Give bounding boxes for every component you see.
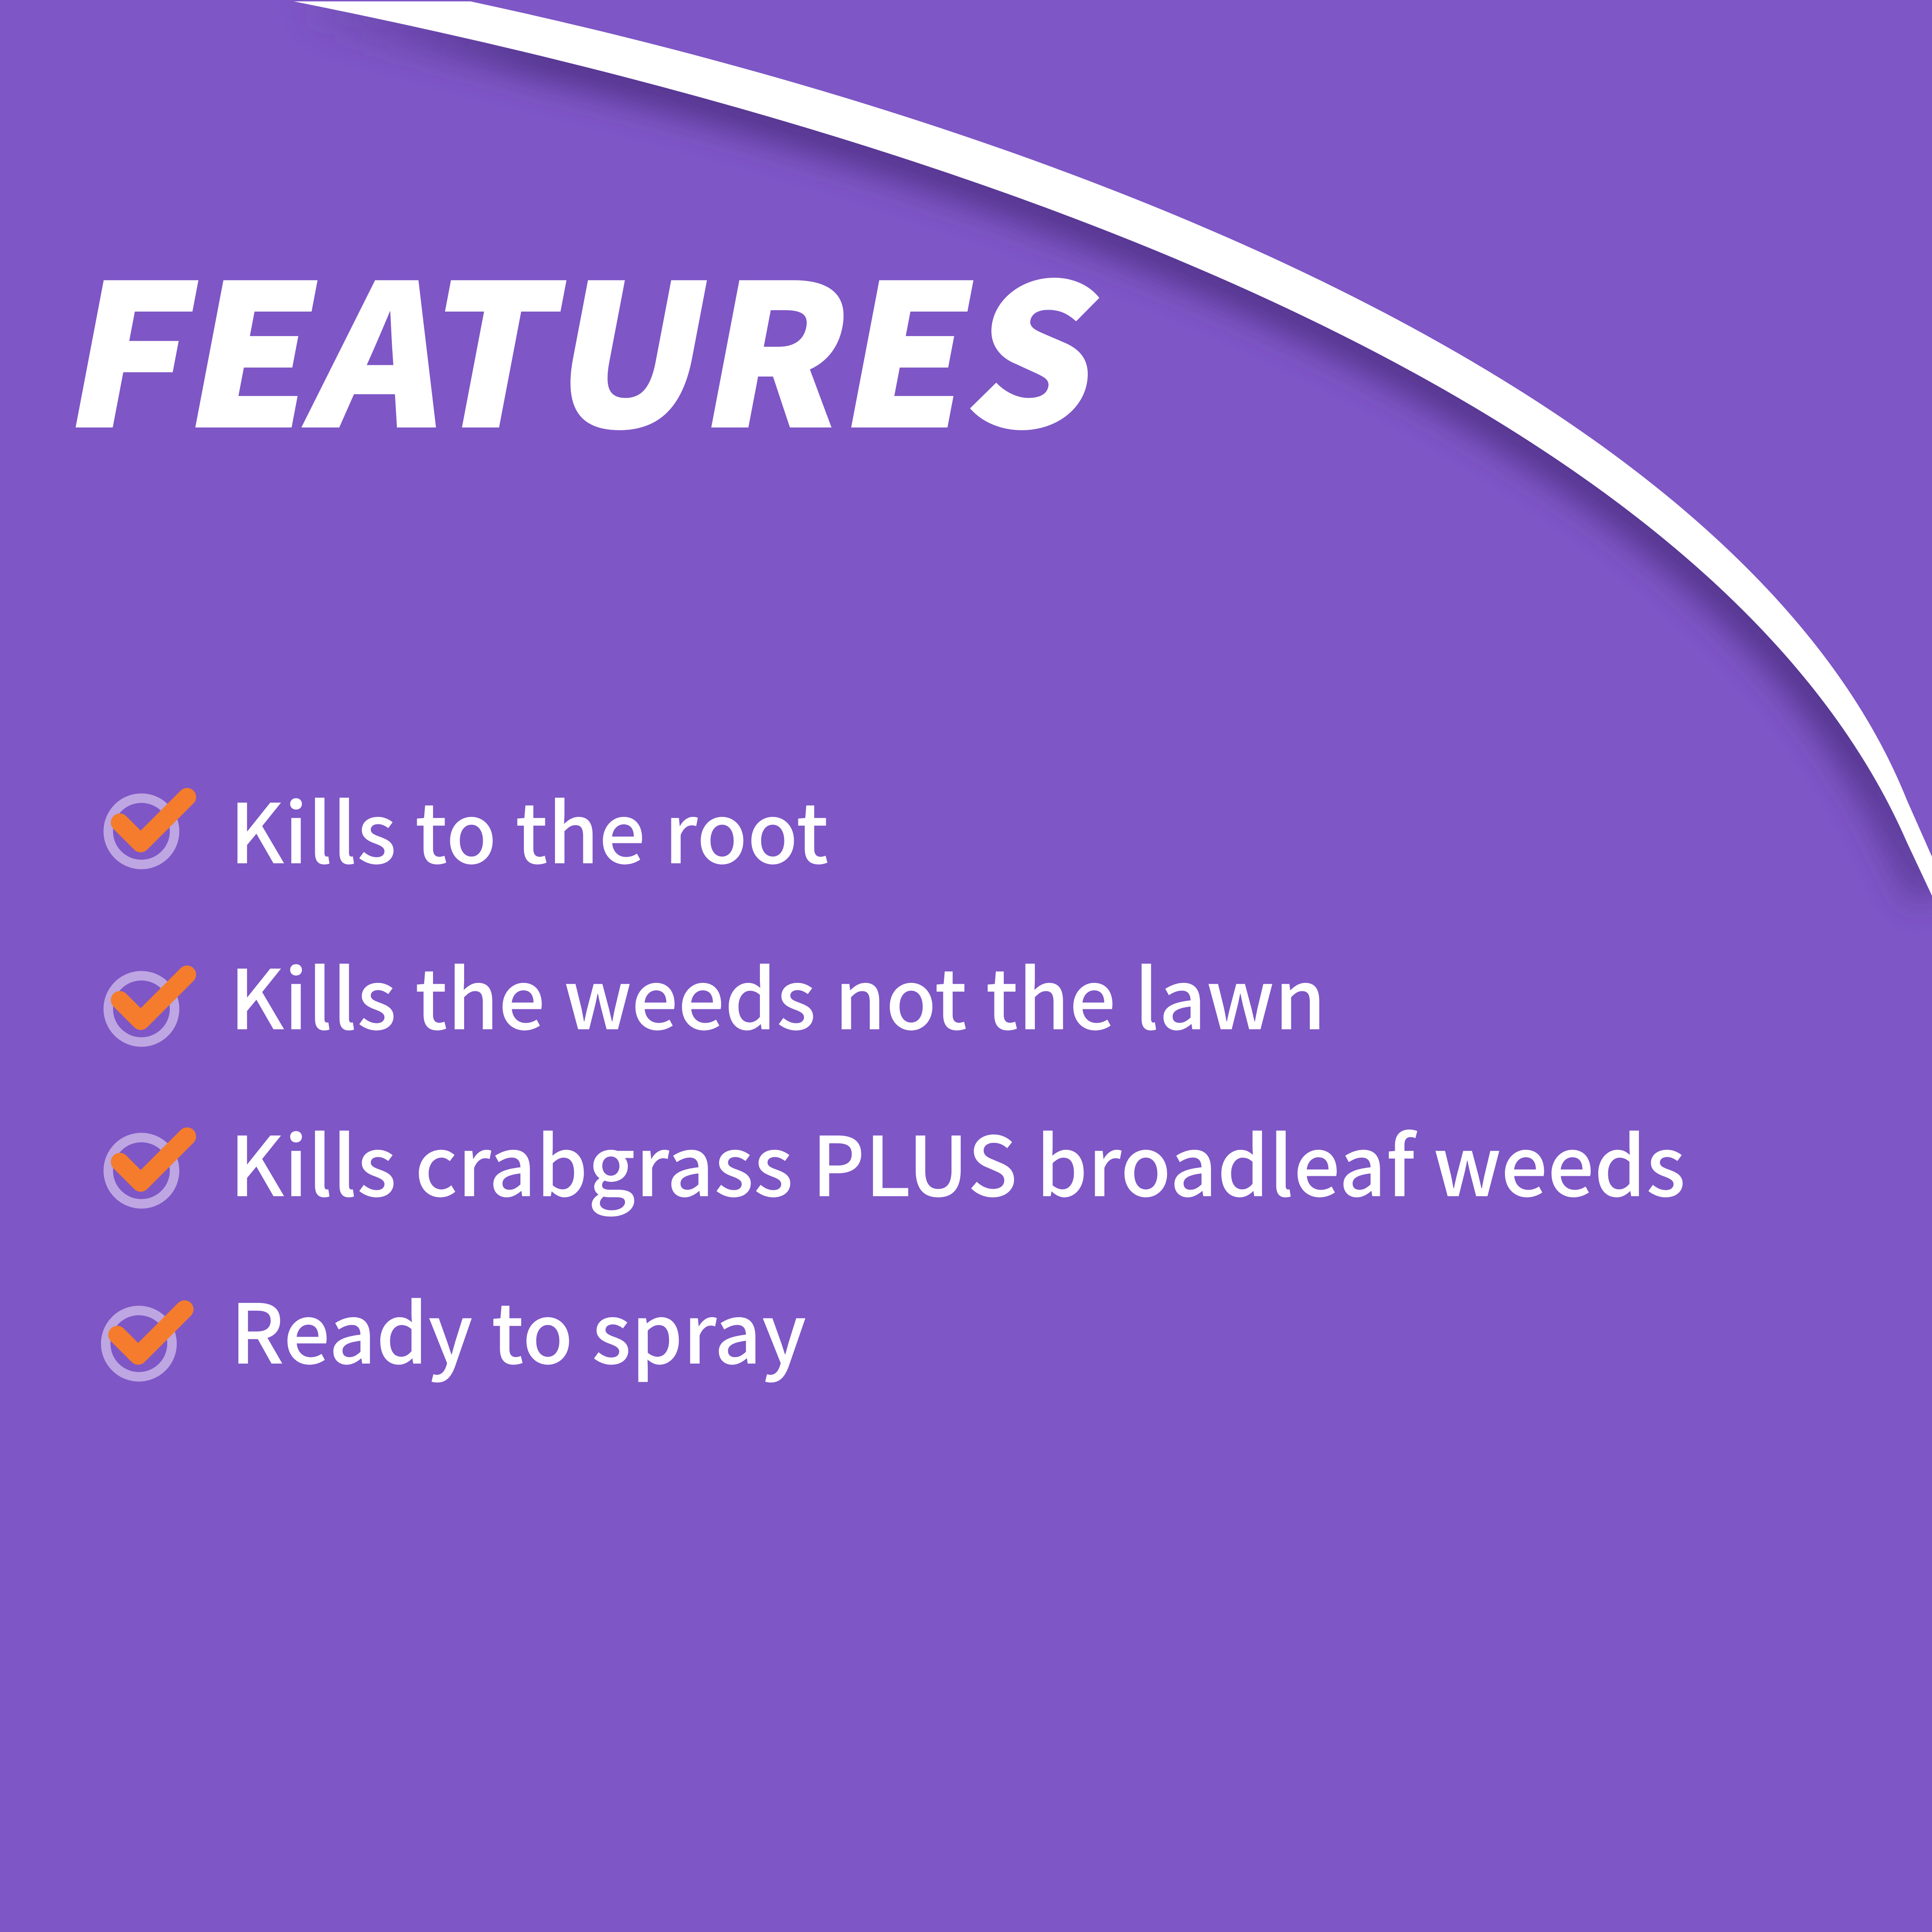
icon: check in circle [108,975,187,1042]
feature row 3 [108,1101,1685,1220]
feature text: Kills crabgrass PLUS broadleaf weeds [230,1101,1685,1220]
feature text: Kills the weeds not the lawn [230,934,1326,1053]
title: FEATURES [50,201,1130,482]
page curl shadow [294,1,1932,896]
icon: check in circle [108,797,187,864]
feature text: Kills to the root [230,768,829,887]
feature row 2 [108,934,1326,1053]
icon: check in circle [106,1309,185,1377]
feature row 1 [108,768,829,887]
feature row 4 [106,1269,806,1388]
icon: check in circle [108,1136,187,1204]
white page curl band [294,1,1932,896]
feature text: Ready to spray [230,1269,806,1388]
